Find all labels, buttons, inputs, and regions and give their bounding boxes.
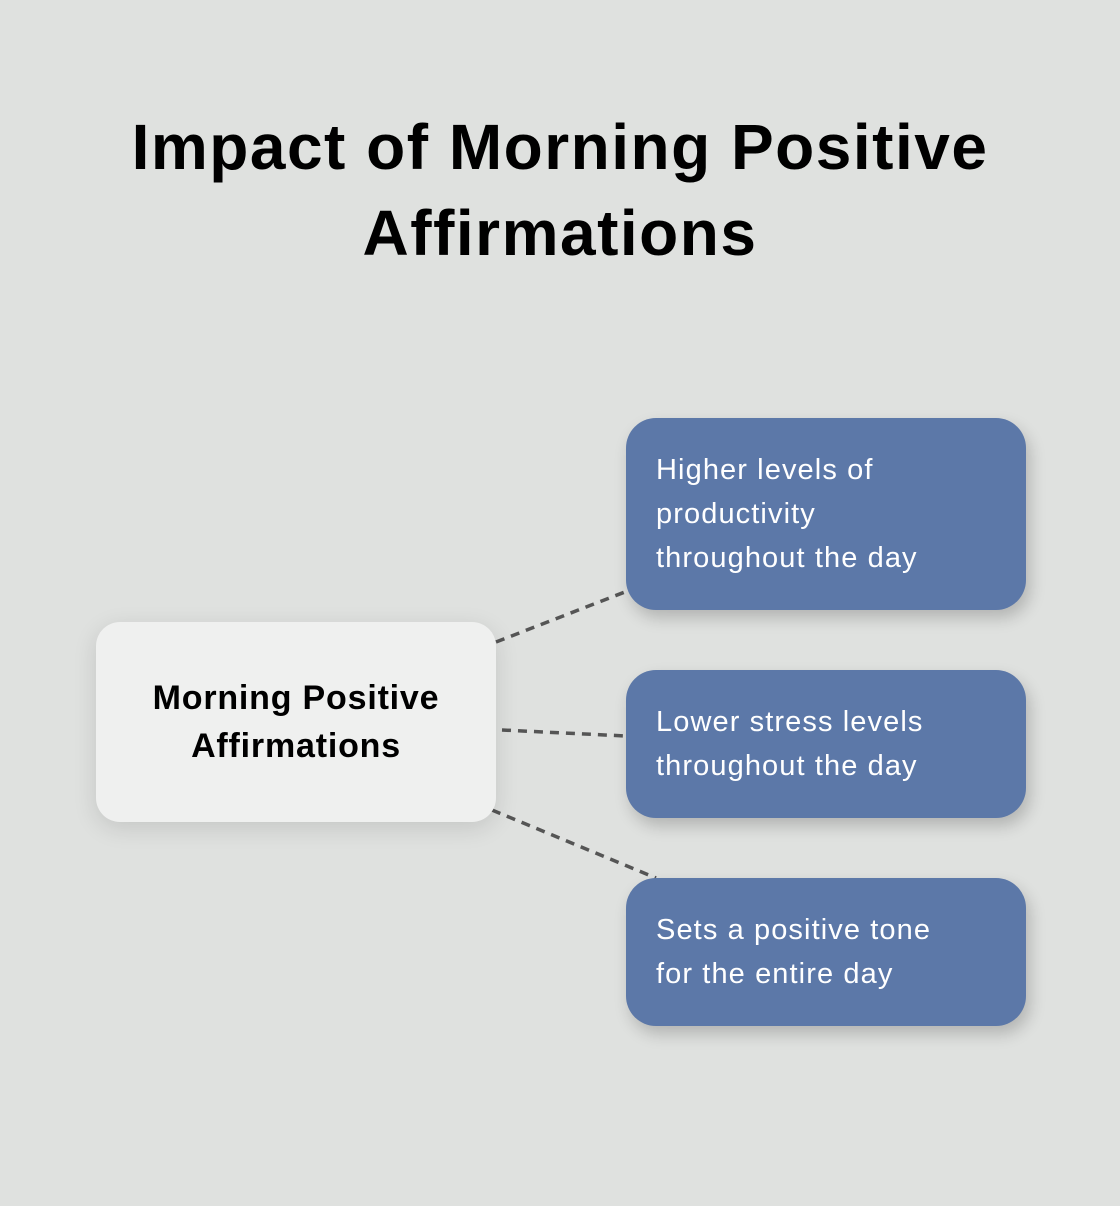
box: stress xyxy=(626,670,1026,818)
box: tone xyxy=(626,878,1026,1026)
box: tone: for the entire day xyxy=(656,958,893,990)
title xyxy=(132,111,988,269)
box: productivity: productivity xyxy=(656,498,816,530)
box: productivity: Higher levels of xyxy=(656,454,873,486)
box: productivity xyxy=(626,418,1026,610)
title: Impact of Morning Positive xyxy=(132,111,988,183)
center box: Morning Positive Affirmations xyxy=(96,622,496,822)
box: productivity: throughout the day xyxy=(656,542,918,574)
box: stress: throughout the day xyxy=(656,750,918,782)
box: tone: Sets a positive tone xyxy=(656,914,931,946)
center box: Morning Positive Affirmations: Affirmations xyxy=(191,727,401,765)
center box: Morning Positive Affirmations: Morning Positive xyxy=(153,679,439,717)
box: stress: Lower stress levels xyxy=(656,706,924,738)
title: Affirmations xyxy=(363,197,757,269)
